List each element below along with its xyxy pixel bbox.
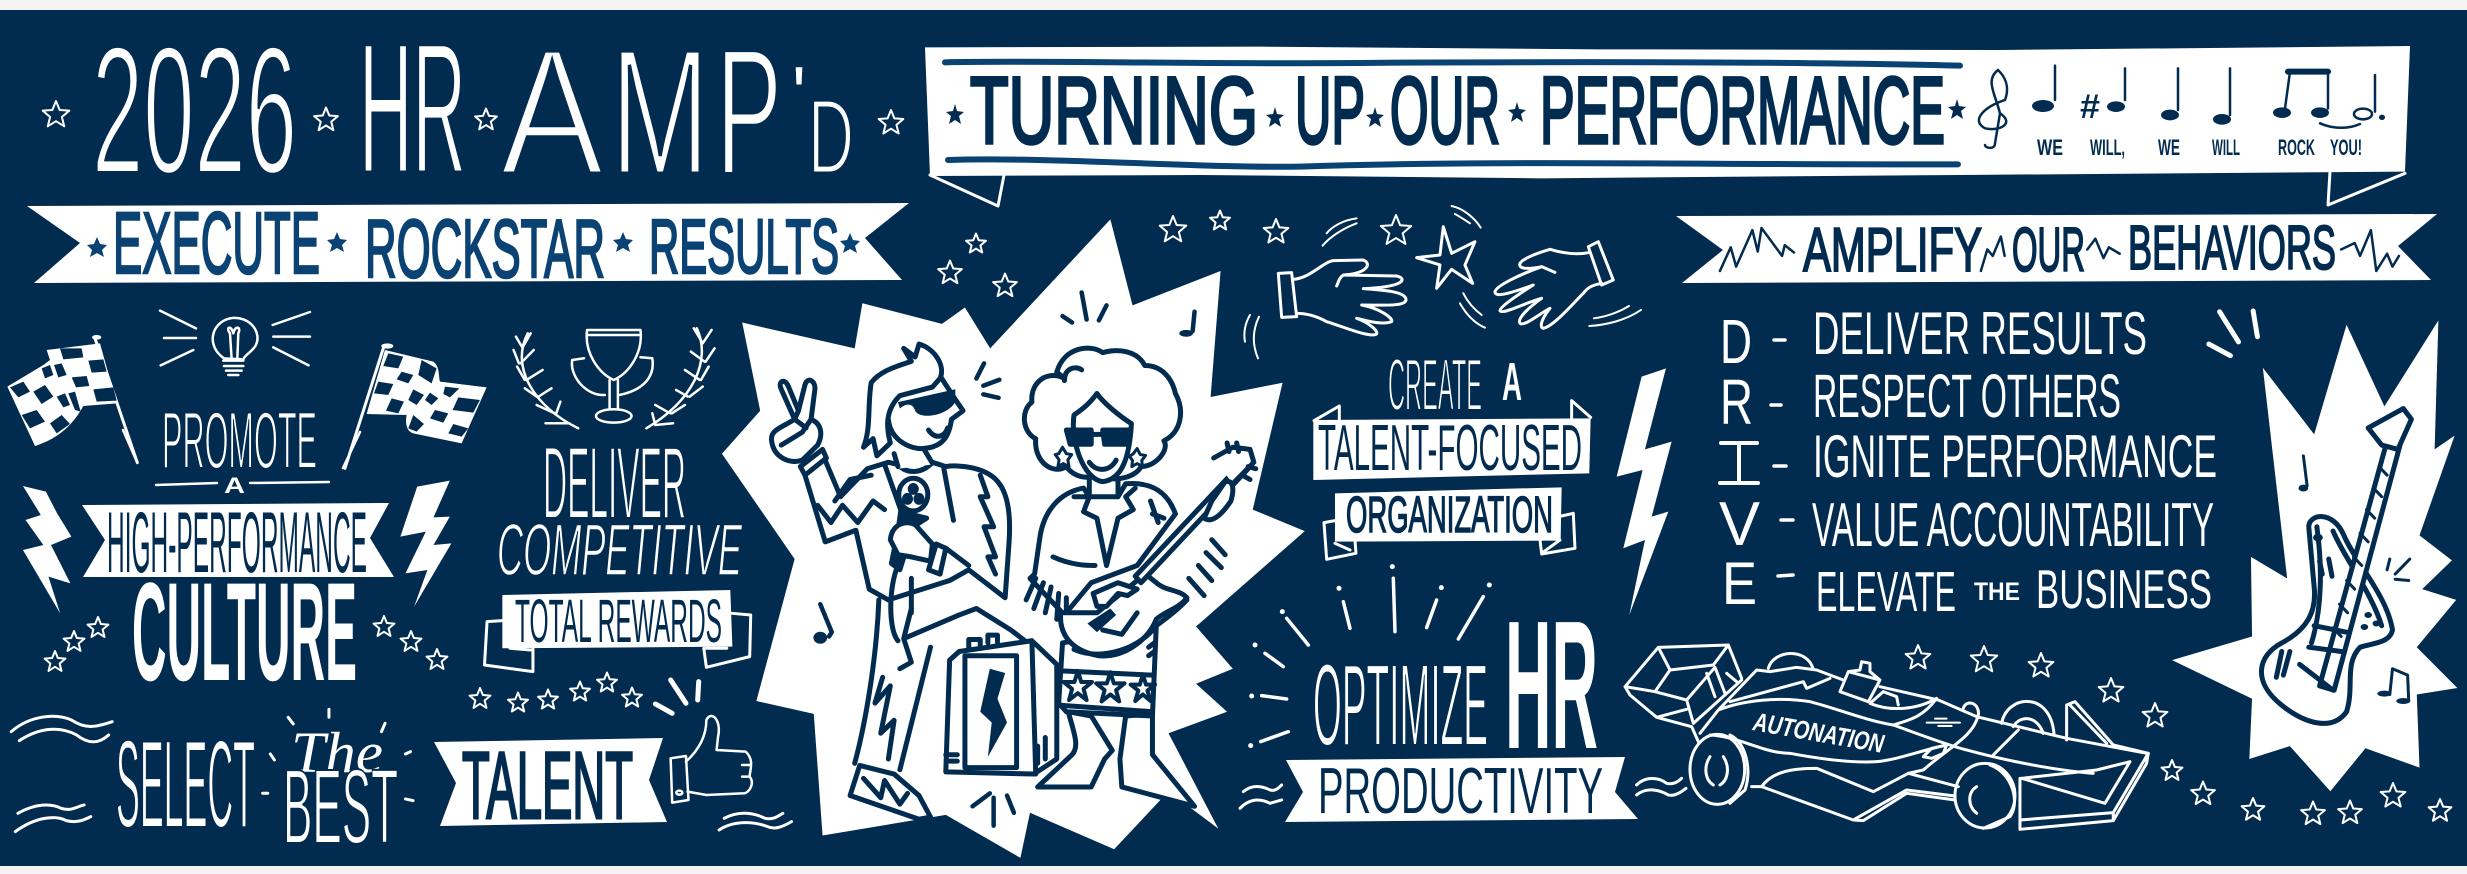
text: select the best: SELECT (116, 716, 255, 854)
icon: thumbs up (671, 716, 752, 803)
title: 2026 HR AMP'd: ' (792, 50, 806, 139)
text: HIGH-PERFORMANCE (107, 495, 367, 591)
list: drive acronym letters: R (1720, 366, 1753, 438)
icon: music notes: # (2080, 88, 2100, 126)
icon: trophy with laurels (514, 328, 715, 428)
banner: organization: ORGANIZATION (1346, 486, 1553, 543)
icon: right checkered flag (345, 343, 487, 468)
stars above starburst (938, 210, 1411, 296)
list: drive behaviors: ELEVATE (1816, 560, 1956, 624)
text: promote a (123, 396, 360, 498)
banner: amplify our behaviors: AMPLIFY (1803, 216, 1982, 285)
amp (946, 635, 1057, 774)
text: CULTURE (132, 553, 357, 710)
title: 2026 HR AMP'd: M (610, 12, 710, 213)
text: create a: A (1502, 352, 1522, 412)
icon: music notes: WE (2037, 135, 2063, 160)
text: optimize hr: OPTIMIZE (1313, 640, 1488, 770)
text: promote a: A (224, 473, 245, 498)
banner: productivity (1285, 754, 1638, 827)
icon: left checkered flag (7, 335, 137, 463)
text: BEST (283, 748, 398, 866)
list: drive acronym letters: I (1733, 429, 1745, 496)
list: drive behaviors (1812, 300, 2217, 624)
motion marks and notes (820, 292, 1195, 826)
icon: music notes: WILL (2212, 135, 2240, 160)
icon: music notes: YOU! (2330, 135, 2362, 160)
icon: music notes: WE (2158, 135, 2180, 160)
banner: talent-focused (1313, 401, 1591, 484)
stars around culture (45, 616, 447, 671)
icon: music notes: WILL, (2090, 135, 2125, 160)
banner: turning up our performance: OUR (1390, 58, 1500, 164)
list: drive acronym letters (1719, 308, 1793, 617)
text: TALENT-FOCUSED (1318, 411, 1582, 484)
illustration: autonation race car (1625, 645, 2148, 829)
illustration: autonation race car: AUTONATION (1750, 706, 1887, 759)
decorative waves and marks: select row (11, 680, 792, 832)
title: 2026 HR AMP'd: D (808, 78, 854, 196)
text: select the best: The (291, 720, 383, 785)
icon: music notes (1979, 66, 2385, 160)
list: drive acronym letters: V (1719, 490, 1761, 559)
text: CREATE (1388, 345, 1482, 426)
stars around car and guitar (1906, 645, 2451, 824)
text: TOTAL REWARDS (515, 587, 722, 655)
text: optimize hr (1313, 582, 1598, 787)
stars above thumb (470, 672, 642, 712)
banner: turning up our performance: UP (1295, 58, 1365, 164)
illustration: rock stars in starburst (722, 219, 1305, 858)
list: drive acronym letters: E (1722, 550, 1757, 617)
title: 2026 HR AMP'd: HR (359, 6, 466, 212)
list: drive behaviors: BUSINESS (2036, 558, 2212, 620)
female guitarist (1024, 348, 1256, 806)
banner: high-performance (82, 495, 394, 591)
waves beside productivity (1240, 778, 1686, 808)
icon: clapping hands and star (1244, 206, 1641, 358)
text: COMPETITIVE (497, 510, 743, 591)
icon: music notes: ROCK (2278, 135, 2315, 160)
banner: turning up our performance: TURNING (970, 58, 1258, 164)
burst lines above optimize (1251, 567, 1489, 746)
text: deliver competitive (497, 426, 743, 591)
male singer (771, 344, 1053, 819)
text: PROMOTE (162, 396, 317, 486)
title: 2026 HR AMP'd: 2026 (92, 8, 297, 212)
banner: productivity: PRODUCTIVITY (1318, 754, 1603, 827)
icon: right centre lightning (1617, 368, 1672, 615)
banner: turning up our performance: PERFORMANCE (1540, 58, 1945, 164)
banner: organization (1324, 486, 1575, 559)
banner: execute rockstar results (27, 195, 909, 295)
banner: total rewards (484, 587, 751, 672)
banner: amplify our behaviors (1676, 214, 2437, 285)
banner: execute rockstar results: RESULTS (649, 204, 839, 290)
banner: execute rockstar results: EXECUTE (113, 195, 320, 292)
banner: amplify our behaviors: OUR (2012, 216, 2085, 285)
list: drive acronym letters: D (1720, 308, 1752, 377)
banner: talent (434, 733, 667, 839)
title: 2026 HR AMP'd: A (500, 12, 604, 213)
list: drive behaviors: RESPECT OTHERS (1813, 362, 2121, 430)
icon: light bulb (160, 311, 310, 375)
list: drive behaviors: THE (1974, 578, 2020, 606)
title: 2026 HR AMP'd: P (716, 12, 782, 213)
icon: left lightning (23, 486, 71, 613)
text: DELIVER (543, 426, 686, 540)
starburst (722, 219, 1305, 858)
title: 2026 HR AMP'd (43, 6, 903, 213)
banner: turning up our performance (925, 46, 2410, 206)
text: create a (1388, 345, 1522, 426)
list: drive behaviors: DELIVER RESULTS (1813, 300, 2147, 367)
banner: talent: TALENT (462, 733, 633, 839)
banner: execute rockstar results: ROCKSTAR (365, 202, 605, 295)
icon: right lightning (400, 481, 451, 607)
illustration: guitar in starburst (2172, 311, 2457, 791)
text: HR (1505, 582, 1598, 787)
text: select the best (116, 716, 398, 866)
